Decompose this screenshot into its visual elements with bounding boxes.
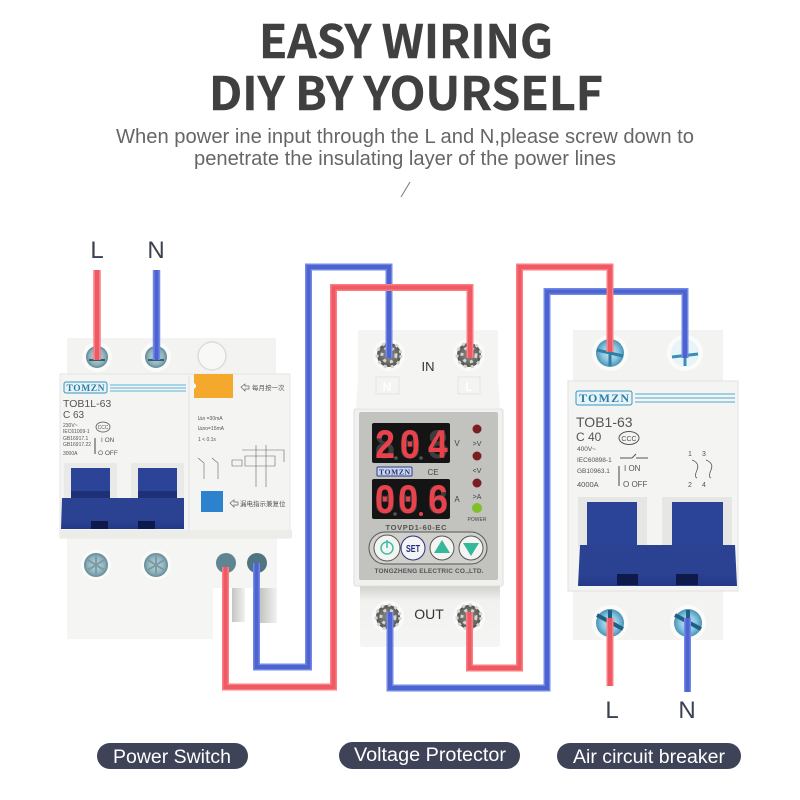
pill: power switch	[97, 743, 248, 769]
wires	[97, 267, 688, 692]
labels	[576, 414, 712, 489]
breaker housing	[60, 338, 292, 639]
in and out terminals: IN	[422, 359, 434, 374]
phase letters: L	[90, 237, 104, 264]
subtitle text: When power ine input through the L and N,please screw down to	[116, 126, 694, 148]
indicator leds: POWER	[468, 517, 487, 523]
logo and CE: A	[454, 495, 460, 504]
subtitle text	[116, 126, 694, 170]
labels: 4000A	[577, 480, 599, 489]
phase letters: L	[605, 697, 619, 724]
indicator leds: >A	[473, 494, 482, 501]
wire: red link switch to protector	[226, 288, 470, 687]
brand logo	[576, 391, 735, 405]
breaker labels: GB16917.1	[63, 436, 89, 442]
pill: power switch: Power Switch	[113, 747, 231, 768]
breaker labels: TOB1L-63	[63, 398, 111, 410]
title: EASY WIRING	[259, 6, 553, 72]
phase letters: N	[147, 237, 165, 264]
voltage display: 888	[374, 424, 449, 471]
brand logo TOMZN	[64, 382, 186, 394]
labels: GB10963.1	[577, 468, 610, 475]
blue switch lever	[578, 497, 737, 586]
pill: air circuit breaker: Air circuit breaker	[573, 747, 726, 768]
pill: voltage protector: Voltage Protector	[354, 745, 507, 766]
voltage display: 204	[374, 424, 449, 471]
labels: 1	[688, 451, 692, 458]
pill: air circuit breaker	[557, 743, 741, 769]
labels: I ON	[624, 464, 641, 473]
labels: IEC60898-1	[577, 457, 612, 464]
din housing	[354, 330, 503, 647]
current display: 888	[374, 479, 449, 526]
phase letters	[90, 237, 696, 724]
slash mark	[401, 182, 410, 197]
phase letters: N	[678, 697, 696, 724]
breaker labels: C 63	[63, 410, 85, 421]
title: DIY BY YOURSELF	[209, 58, 603, 124]
wire: blue link protector to breaker	[390, 292, 685, 688]
test button and markings: 漏电指示兼复位	[240, 499, 286, 508]
brand logo: TOMZN	[579, 391, 629, 405]
breaker labels: 230V~	[63, 423, 78, 429]
wire: blue link switch to protector	[256, 267, 389, 667]
control buttons	[369, 532, 487, 564]
breaker labels: O OFF	[98, 450, 118, 457]
current display: 006	[374, 479, 449, 526]
indicator leds: <V	[473, 468, 482, 475]
in and out terminals	[372, 339, 485, 633]
company name: TONGZHENG ELECTRIC CO.,LTD.	[374, 568, 484, 575]
breaker labels: I ON	[101, 437, 115, 444]
panel: voltage protector	[354, 330, 503, 647]
wire: N input	[153, 270, 160, 360]
test button and markings	[194, 374, 286, 512]
test button and markings: 1 < 0.1s	[198, 437, 216, 443]
logo and CE: V	[454, 439, 460, 448]
logo and CE: TOMZN	[379, 468, 411, 476]
labels: 2	[688, 482, 692, 489]
logo and CE	[377, 439, 460, 504]
din housing: N	[383, 380, 391, 394]
indicator leds	[468, 424, 487, 523]
breaker labels: GB16917.22	[63, 442, 91, 448]
breaker labels	[63, 398, 118, 457]
labels: 400V~	[577, 446, 596, 453]
labels: O OFF	[623, 480, 648, 489]
wire: red link protector to breaker	[470, 267, 610, 668]
logo and CE: CE	[427, 468, 439, 477]
grey faceplate	[359, 412, 498, 580]
din housing: L	[465, 380, 473, 394]
terminals	[592, 335, 706, 641]
labels: TOB1-63	[576, 414, 633, 430]
breaker labels: CCC	[98, 425, 109, 431]
labels: CCC	[621, 436, 637, 443]
breaker labels: 3000A	[63, 451, 78, 457]
bottom terminals	[81, 550, 267, 580]
pill: voltage protector	[339, 742, 520, 769]
top terminals	[82, 342, 226, 372]
blue switch lever	[61, 463, 184, 529]
in and out terminals: OUT	[414, 606, 444, 622]
labels: C 40	[576, 430, 602, 444]
labels: 3	[702, 451, 706, 458]
breaker labels: IEC61009-1	[63, 429, 90, 435]
indicator leds: >V	[473, 441, 482, 448]
test button and markings: 每月按一次	[252, 383, 285, 392]
model label: TOVPD1-60-EC	[386, 523, 447, 532]
control buttons: SET	[406, 544, 420, 555]
test button and markings: I∆no=15mA	[198, 426, 225, 432]
wire: N output	[684, 618, 691, 692]
brand logo TOMZN: TOMZN	[66, 384, 105, 394]
panel: power switch breaker	[60, 338, 292, 639]
subtitle text: penetrate the insulating layer of the power lines	[194, 148, 616, 170]
panel: air circuit breaker	[568, 330, 738, 641]
test button and markings: I∆n =30mA	[198, 416, 223, 422]
wire: L output	[606, 618, 614, 686]
housing	[568, 330, 738, 640]
labels: 4	[702, 482, 706, 489]
wire: L input	[93, 270, 101, 360]
title	[209, 6, 603, 124]
